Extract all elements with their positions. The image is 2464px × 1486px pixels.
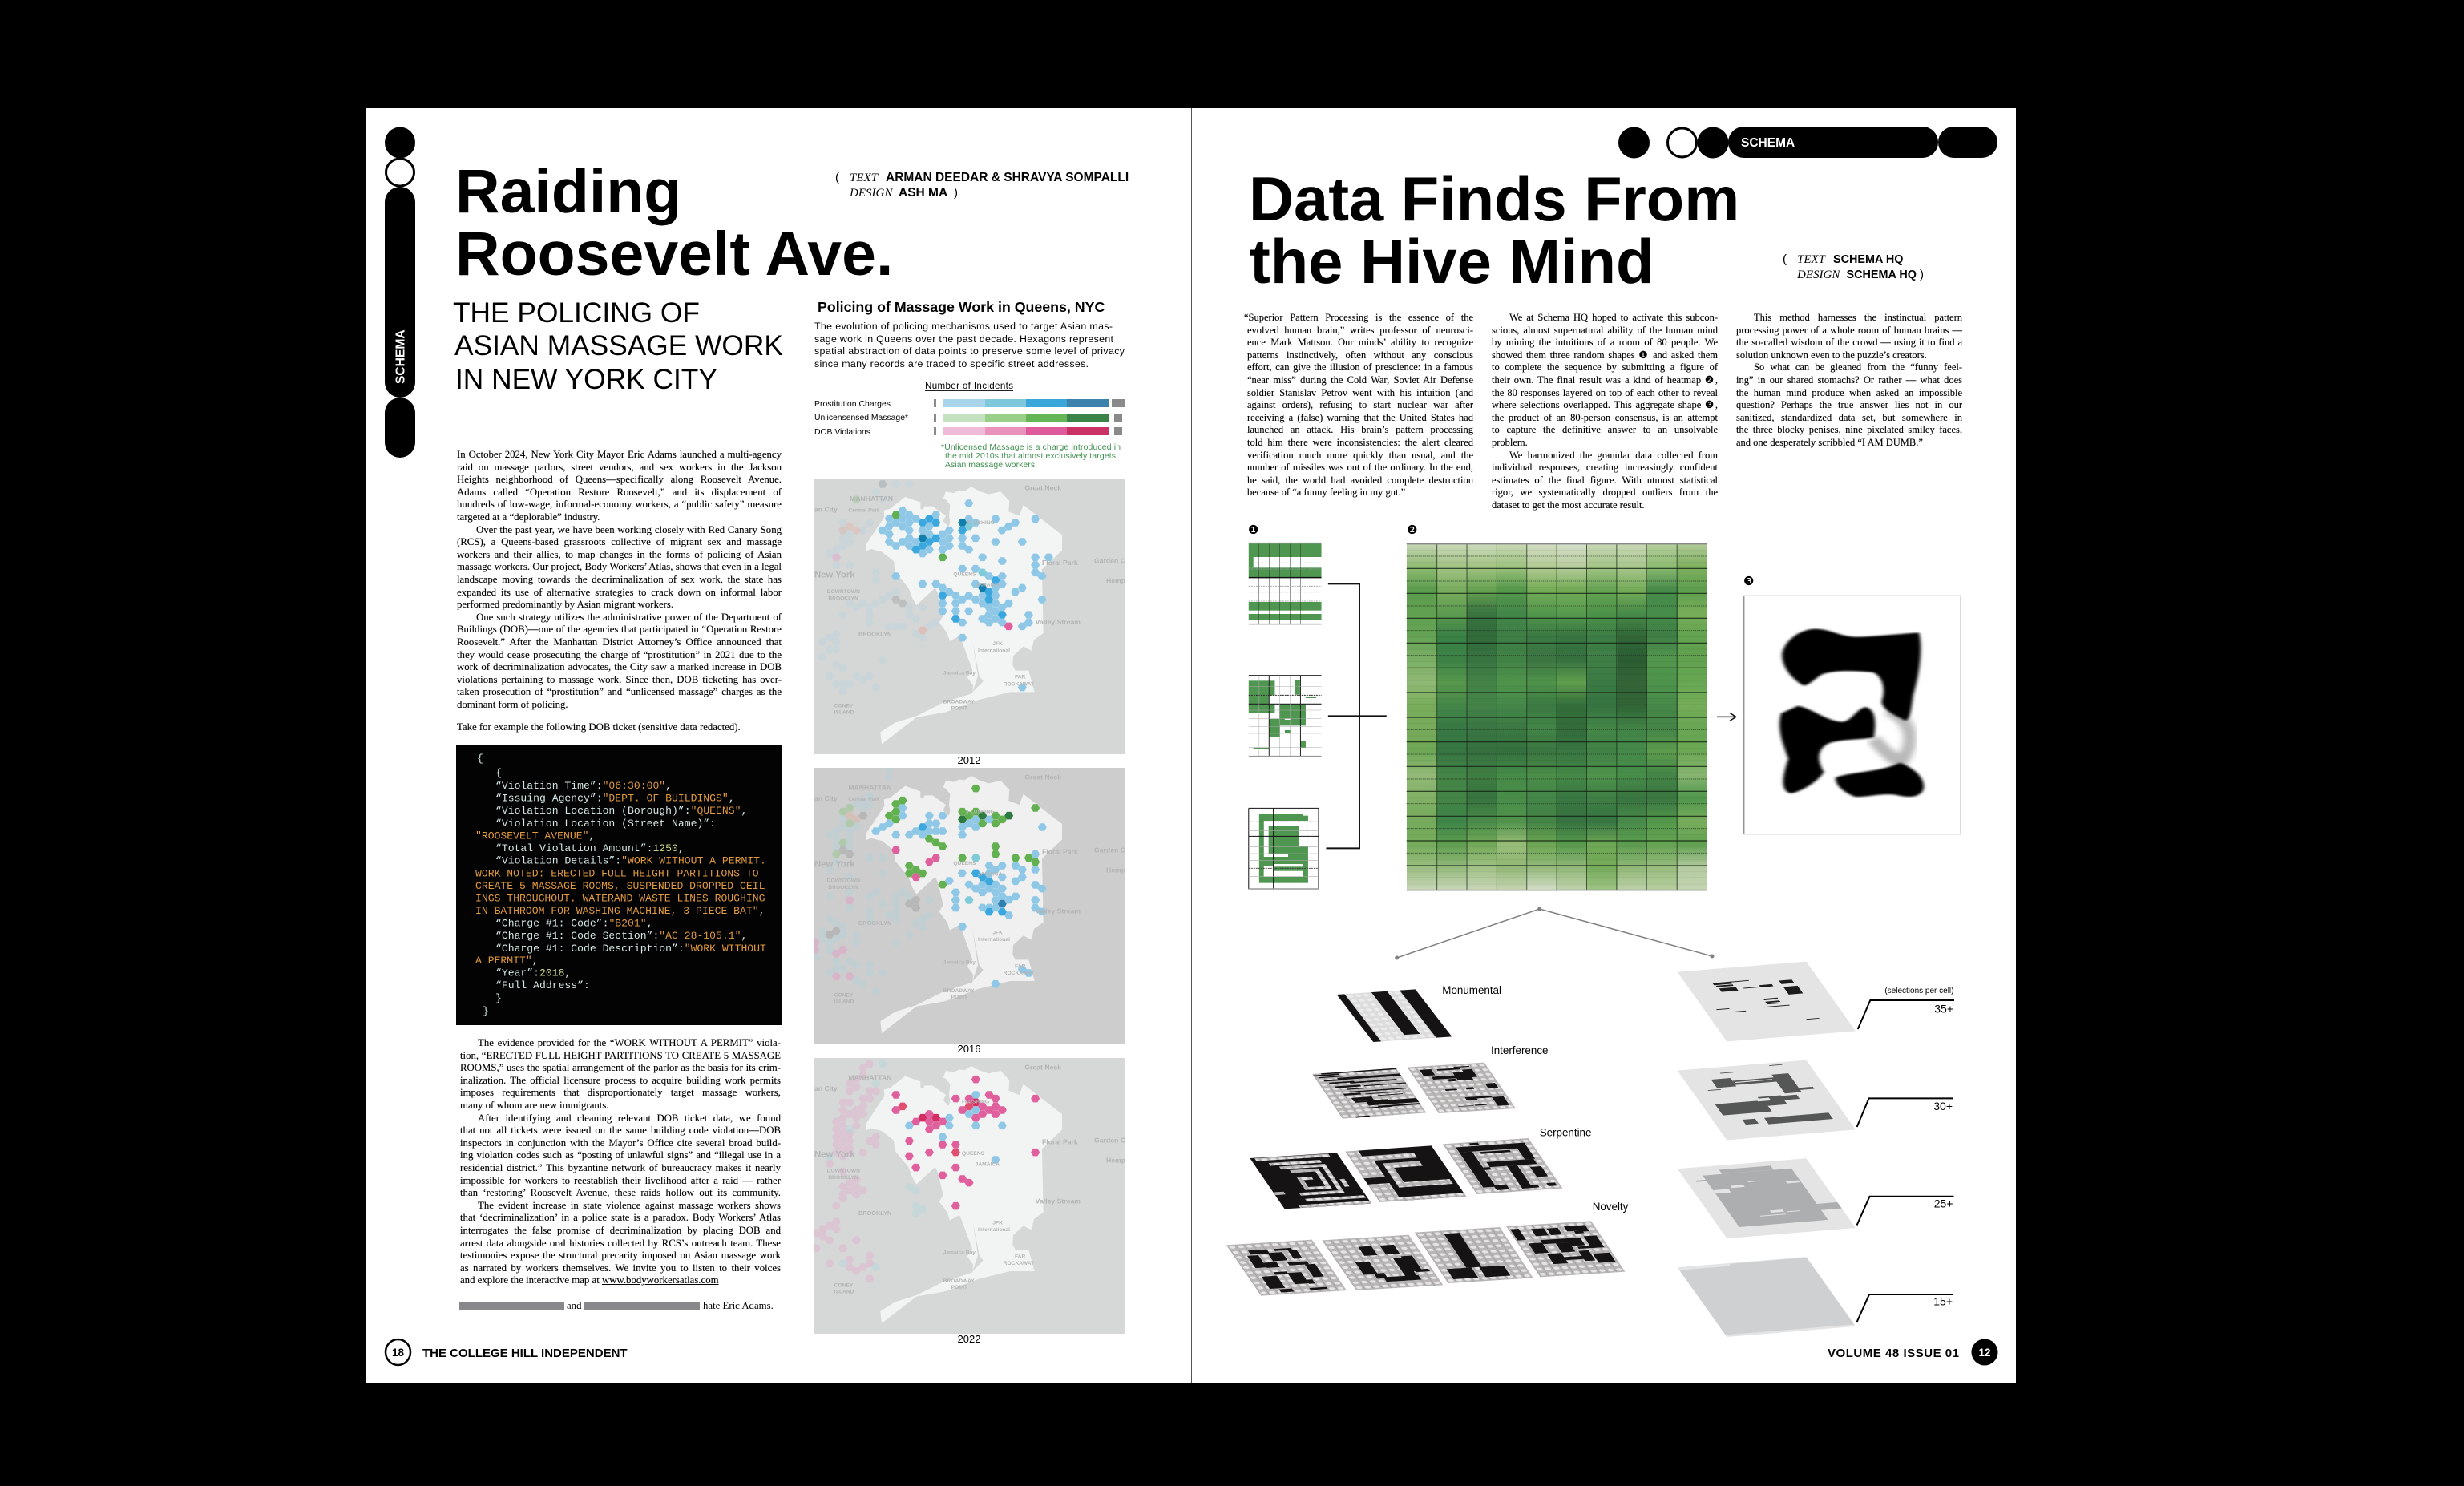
credits: left article: ASH MA: [899, 186, 947, 200]
map: 2016: Floral Park: [1042, 848, 1078, 856]
code block: DOB ticket: “Violation Location (Borough)”:"QUEENS",: [495, 805, 747, 817]
map: 2016: Jamaica Bay: [943, 959, 976, 965]
legend footnote: *Unlicensed Massage is a charge introduced in: [941, 443, 1121, 452]
text block: right column 2: problem.: [1492, 437, 1528, 448]
code block: DOB ticket: }: [483, 1005, 489, 1017]
map: 2012: Floral Park: [1042, 559, 1078, 567]
map: 2012: Central Park: [848, 507, 880, 513]
chart description: spatial abstraction of data points to preserve some level of privacy: [814, 345, 1125, 357]
code block: DOB ticket: “Charge #1: Code Description”:"WORK WITHOUT: [495, 943, 766, 955]
text block: left continuation: imposes requirements that disproportionately target massage workers,: [460, 1087, 781, 1098]
category labels: Monumental: [1442, 984, 1501, 996]
map: 2022: CONEY: [834, 1282, 854, 1288]
text block: left continuation: that not all tickets were issued on the same building code violation—DOB: [460, 1125, 781, 1136]
tab: right schema pills: [1618, 127, 1997, 159]
map: 2022: Valley Stream: [1036, 1197, 1081, 1205]
text block: left continuation: that ‘decriminalization’ in a police state is a paradox. Body Workers’ Atlas: [460, 1212, 781, 1223]
map: 2016: FAR: [1015, 963, 1026, 969]
map caption 2012: 2012: [958, 754, 980, 766]
map: 2022: an City: [814, 1084, 838, 1092]
text block: right column 2: scious, almost supernatural ability of the human mind: [1492, 325, 1718, 336]
redaction line: [459, 1300, 774, 1311]
credits: right article: (: [1783, 252, 1787, 266]
text block: right column 3: This method harnesses the instinctual pattern: [1754, 312, 1962, 323]
legend: number of incidents: Prostitution Charges: [814, 400, 891, 409]
tile group: Novelty: [1226, 1221, 1625, 1296]
text block: right column 1: evolved human brain,” writes professor of neurosci-: [1247, 325, 1473, 336]
subtitle: the policing of asian massage work: ASIAN MASSAGE WORK: [454, 330, 783, 361]
text block: left intro: [457, 449, 782, 710]
credits: right article: SCHEMA HQ: [1833, 253, 1903, 266]
text block: left intro: massage workers. Our project, Body Workers’ Atlas, shows that even in a legal: [457, 561, 782, 572]
text block: right column 1: because of “a funny feeling in my gut.”: [1247, 487, 1405, 498]
map: 2022: MANHATTAN: [848, 1074, 891, 1082]
map: 2012: an City: [814, 505, 838, 513]
text block: right column 1: told him there were inconsistencies: the alert cleared: [1247, 437, 1473, 448]
text block: left intro: In October 2024, New York City Mayor Eric Adams launched a multi-agency: [457, 449, 782, 460]
text block: right column 1: ence Mark Mattson. Our minds’ ability to recognize: [1247, 337, 1473, 348]
text block: right column 3: the three blocky penises, nine pixelated smiley faces,: [1736, 424, 1962, 435]
text block: left intro: performed predominantly by Asian migrant workers.: [457, 599, 673, 610]
title: Raiding Roosevelt Ave.: Roosevelt Ave.: [455, 220, 893, 289]
code block: DOB ticket: “Violation Details”:"WORK WITHOUT A PERMIT.: [495, 854, 766, 867]
code block: DOB ticket: INGS THROUGHOUT. WATERAND WASTE LINES ROUGHING: [475, 893, 765, 904]
map: 2012: MANHATTAN: [850, 495, 893, 503]
map: 2022: POINT: [951, 1285, 967, 1290]
map: 2012: ISLAND: [834, 710, 854, 716]
map: 2016: ROCKAWAY: [1004, 971, 1035, 976]
title: Data Finds From the Hive Mind: Data Finds From: [1249, 165, 1739, 234]
text block: left continuation: inspectors in conjunction with the Mayor’s Office cite several broad build-: [460, 1137, 781, 1149]
text block: left continuation: arrest data alongside oral histories collected by RCS’s outreach team. These: [460, 1238, 781, 1249]
threshold layer 25+: [1678, 1158, 1856, 1238]
map: 2012: JAMAICA: [976, 583, 1000, 588]
credits: right article: SCHEMA HQ: [1847, 269, 1917, 281]
code block: DOB ticket: “Charge #1: Code”:"B201",: [495, 917, 652, 930]
tile group: Monumental: [1337, 989, 1452, 1042]
category labels: Interference: [1491, 1044, 1548, 1056]
map: 2022: [812, 1058, 1144, 1334]
map: 2022: Hempstead: [1106, 1156, 1144, 1164]
code block: DOB ticket: “Violation Location (Street Name)”:: [495, 818, 716, 830]
threshold callouts: 35+: [1934, 1003, 1953, 1016]
map: 2016: an City: [814, 794, 838, 802]
text block: left continuation: many of whom are new immigrants.: [460, 1100, 609, 1111]
chart description: The evolution of policing mechanisms used to target Asian mas-: [814, 321, 1113, 332]
map: 2012: Valley Stream: [1036, 618, 1081, 626]
text block: right column 1: launched an attack. His brain’s pattern processing: [1247, 424, 1473, 435]
map: 2016: JFK: [992, 931, 1003, 936]
text block: DOB ticket lead-in: Take for example the following DOB ticket (sensitive data redacted).: [457, 721, 741, 733]
text block: left continuation: After identifying and cleaning relevant DOB ticket data, we found: [478, 1112, 781, 1124]
text block: right column 3: the so-called wisdom of the crowd — using it to find a: [1736, 337, 1962, 348]
text block: right column 3: processing power of a whole room of human brains —: [1736, 325, 1962, 336]
text block: right column 1: “near miss” during the Cold War, Soviet Air Defense: [1247, 374, 1473, 386]
text block: right column 3: So what can be gleaned from the “funny feel-: [1754, 361, 1962, 373]
footer: left page number: 18: [392, 1347, 404, 1359]
text block: right column 2: the 80 responses layered on top of each other to reveal: [1492, 387, 1718, 398]
heatmap fill: [1407, 544, 1707, 890]
title: Raiding Roosevelt Ave.: Raiding: [455, 157, 681, 226]
text block: right column 2: their own. The final result was a kind of heatmap ❷,: [1492, 374, 1718, 386]
threshold layer 15+: [1678, 1257, 1856, 1337]
text block: right column 2: to capture the definitive answer to an unsolvable: [1492, 424, 1718, 435]
chart description: [814, 321, 1125, 369]
text block: right column 2: the product of an 80-person consensus, is an attempt: [1492, 412, 1718, 423]
map: 2022: ISLAND: [834, 1289, 854, 1294]
threshold layer 30+: [1678, 1060, 1856, 1140]
map: 2022: International: [978, 1227, 1010, 1233]
bracket connector: [1326, 583, 1387, 848]
category labels: Novelty: [1593, 1201, 1629, 1213]
text block: left intro: Buildings (DOB)—one of the agencies that participated in “Operation Restore: [457, 624, 782, 635]
map: 2022: BROOKLYN: [858, 1209, 891, 1217]
title: Raiding Roosevelt Ave.: [455, 157, 893, 289]
tab: right schema pills: SCHEMA: [1741, 136, 1795, 150]
map: 2016: DOWNTOWN: [827, 878, 860, 884]
text block: left continuation: The evidence provided for the “WORK WITHOUT A PERMIT” viola-: [478, 1037, 781, 1048]
map: 2022: JAMAICA: [976, 1161, 1000, 1167]
text block: left intro: Roosevelt.” After the Manhattan District Attorney’s Office announced that: [457, 636, 782, 648]
text block: left intro: One such strategy utilizes the administrative power of the Department of: [476, 612, 782, 623]
credits: right article: DESIGN: [1796, 269, 1840, 281]
category labels: Serpentine: [1540, 1127, 1591, 1139]
map: 2016: JAMAICA: [978, 871, 1003, 877]
text block: left intro: hundreds of low-wage, informal-economy workers, a “public safety” measure: [457, 499, 782, 510]
chart description: sage work in Queens over the past decade. Hexagons represent: [814, 333, 1114, 345]
map: 2016: Central Park: [848, 797, 880, 802]
footer: right page number: 12: [1978, 1347, 1991, 1359]
tab: left schema pills: [385, 127, 415, 458]
map: 2022: FLUSHING: [962, 1100, 989, 1105]
text block: left continuation: tion, “ERECTED FULL HEIGHT PARTITIONS TO CREATE 5 MASSAGE: [460, 1050, 781, 1061]
credits: left article: ): [954, 186, 958, 200]
text block: left intro: taken prosecution of “prostitution” and “unlicensed massage” charges as the: [457, 686, 782, 697]
threshold callouts: (selections per cell): [1884, 987, 1954, 995]
text block: right column 1: patterns instinctively, often without any conscious: [1247, 349, 1473, 361]
text block: right column 1: receiving a (false) warning that the United States had: [1247, 412, 1473, 423]
figure markers 1 2 3: [1248, 523, 1754, 588]
text block: left intro: they would cease prosecuting the charge of “prostitution” in 2021 due to the: [457, 649, 782, 660]
text block: right column 2: to complete the sequence by submitting a figure of: [1492, 361, 1718, 373]
arrow: [1717, 713, 1736, 721]
credits: left article: ARMAN DEEDAR & SHRAVYA SOMPALLI: [886, 171, 1129, 184]
map: 2016: Hempstead: [1106, 866, 1144, 874]
map: 2016: ISLAND: [834, 999, 854, 1004]
text block: right column 1: verification much more quickly than usual, and the: [1247, 450, 1473, 461]
text block: left continuation: residential district.” This byzantine network of bureaucracy makes it nearly: [460, 1162, 781, 1173]
code block: DOB ticket: "ROOSEVELT AVENUE",: [475, 830, 595, 842]
text block: left continuation: The evident increase in state violence against massage workers shows: [478, 1200, 781, 1211]
text block: right column 3: and one desperately scribbled “I AM DUMB.”: [1736, 437, 1923, 448]
map: 2012: BROADWAY: [943, 699, 975, 705]
map: 2016: CONEY: [834, 992, 854, 998]
map: 2012: FAR: [1015, 675, 1026, 680]
text block: left intro: Heights neighborhood of Queens—specifically along Roosevelt Avenue.: [457, 474, 782, 485]
code block: DOB ticket: “Violation Time”:"06:30:00",: [495, 780, 672, 792]
text block: right column 3: sanitized, standardized data set, but somewhere in: [1736, 412, 1962, 423]
text block: left continuation: as narrated by workers themselves. We invite you to listen to their voices: [460, 1262, 781, 1274]
text block: left intro: expanded its use of alternative strategies to crack down on informal labor: [457, 587, 782, 598]
credits: left article: [835, 171, 1129, 200]
text block: right column 1: he said, the world had avoided complete destruction: [1247, 474, 1473, 486]
code block: DOB ticket: “Total Violation Amount”:1250,: [495, 842, 685, 854]
text block: right column 1: number of missiles was out of the ordinary. In the end,: [1247, 462, 1473, 473]
text block: right column 2: by mining the intuitions of a room of 80 people. We: [1492, 337, 1718, 348]
map: 2012: JFK: [992, 641, 1003, 647]
map: 2016: QUEENS: [953, 861, 976, 866]
code block: DOB ticket: “Charge #1: Code Section”:"AC 28-105.1",: [495, 930, 747, 942]
text block: right column 1: [1244, 312, 1473, 498]
map: 2012: Garden City: [1094, 557, 1133, 565]
map caption 2016: 2016: [958, 1043, 980, 1055]
credits: left article: (: [835, 171, 839, 184]
map: 2012: CONEY: [834, 704, 854, 709]
code block: DOB ticket: “Year”:2018,: [495, 967, 571, 979]
map: 2016: MANHATTAN: [848, 784, 891, 792]
code block: DOB ticket: IN BATHROOM FOR WASHING MACHINE, 3 PIECE BAT",: [475, 905, 765, 917]
figure markers 1 2 3: ❷: [1407, 523, 1417, 537]
redaction line: hate Eric Adams.: [703, 1300, 774, 1311]
text block: left continuation: testimonies expose the structural precarity imposed on Asian massage work: [460, 1250, 781, 1261]
text block: left intro: targeted at a “deplorable” industry.: [457, 511, 600, 523]
map: 2012: Great Neck: [1024, 484, 1061, 492]
threshold callouts: 25+: [1934, 1197, 1953, 1209]
map caption 2022: 2022: [958, 1333, 980, 1345]
map: 2012: New York: [814, 571, 855, 580]
map: 2016: Great Neck: [1024, 773, 1061, 781]
legend: number of incidents: Number of Incidents: [925, 381, 1013, 391]
chart description: since many records are traced to specific street addresses.: [814, 358, 1089, 369]
map: 2012: POINT: [951, 705, 967, 711]
code block: DOB ticket: “Issuing Agency”:"DEPT. OF BUILDINGS",: [495, 792, 735, 805]
map: 2012: Hempstead: [1106, 577, 1144, 585]
text block: right column 2: We at Schema HQ hoped to activate this subcon-: [1509, 312, 1718, 323]
code block: DOB ticket: A PERMIT",: [475, 955, 539, 967]
chart heading: Policing of Massage Work in Queens, NYC: [818, 299, 1105, 315]
text block: right column 2: individual responses, creating increasingly confident: [1492, 462, 1718, 473]
heatmap grid lines: [1407, 543, 1707, 890]
legend: number of incidents: Unlicensensed Massage*: [814, 414, 908, 422]
text block: right column 1: against orders), refusing to start nuclear war after: [1247, 399, 1473, 410]
category labels: [1442, 984, 1629, 1213]
input shape 2: [1249, 676, 1322, 757]
code block: DOB ticket: “Full Address”:: [495, 979, 590, 991]
title: Data Finds From the Hive Mind: the Hive Mind: [1250, 228, 1654, 297]
pattern tiles: categories: [1226, 989, 1625, 1296]
map: 2012: DOWNTOWN: [827, 589, 860, 595]
code block: DOB ticket: CREATE 5 MASSAGE ROOMS, SUSPENDED DROPPED CEIL-: [475, 880, 771, 892]
footer: publication name: THE COLLEGE HILL INDEPENDENT: [422, 1347, 628, 1360]
map: 2022: Garden City: [1094, 1136, 1133, 1144]
text block: left continuation: inalization. The official licensure process to acquire building work permits: [460, 1075, 781, 1086]
map: 2016: New York: [814, 859, 855, 869]
map: 2022: BROADWAY: [943, 1278, 975, 1284]
map: 2022: BROOKLYN: [828, 1175, 858, 1181]
footer: volume and issue: VOLUME 48 ISSUE 01: [1828, 1347, 1959, 1360]
text block: right column 1: effort, can give the illusion of prescience: in a famous: [1247, 361, 1473, 373]
text block: left continuation: interrogates the false promise of decriminalization by placing DOB and: [460, 1225, 781, 1236]
title: Data Finds From the Hive Mind: [1249, 165, 1739, 297]
text block: right column 3: solution unknown even to the puzzle’s creators.: [1736, 349, 1927, 361]
code block: DOB ticket: WORK NOTED: ERECTED FULL HEIGHT PARTITIONS TO: [475, 867, 759, 880]
map: 2016: Garden City: [1094, 846, 1133, 854]
code block: DOB ticket: [456, 745, 782, 1025]
map: 2016: [810, 765, 1144, 1044]
small grids and connectors: [1249, 543, 1961, 890]
map: 2012: [814, 479, 1144, 754]
text block: right column 3: question? Perhaps the true answer lies not in our: [1736, 399, 1962, 410]
map: 2022: New York: [814, 1149, 855, 1159]
text block: right column 2: showed them three random shapes ❶ and asked them: [1492, 349, 1718, 361]
map: 2022: FAR: [1015, 1254, 1026, 1259]
threshold callouts: [1856, 987, 1954, 1322]
code block: DOB ticket: }: [495, 992, 502, 1004]
aggregate shape panel: [1744, 596, 1961, 834]
threshold callouts: 30+: [1933, 1100, 1953, 1112]
credits: right article: [1783, 252, 1924, 281]
panel: right page: [1192, 108, 2016, 1383]
map: 2016: International: [978, 937, 1010, 943]
text block: left continuation: [460, 1037, 781, 1286]
threshold callouts: 15+: [1933, 1295, 1953, 1308]
map: 2022: Floral Park: [1042, 1138, 1078, 1146]
text block: right column 2: dataset to get the most accurate result.: [1492, 499, 1645, 511]
map: 2022: QUEENS: [962, 1151, 985, 1157]
legend: number of incidents: [814, 381, 1125, 437]
text block: left continuation: and explore the interactive map at www.bodyworkersatlas.com: [460, 1274, 719, 1286]
text block: left continuation: ROOMS,” uses the spatial arrangement of the parlor as the basis for its crim-: [460, 1062, 781, 1073]
threshold layer 35+: [1678, 962, 1856, 1042]
map: 2022: JFK: [992, 1221, 1003, 1226]
text block: left continuation: than ‘restoring’ Roosevelt Avenue, these raids hollow out its community.: [460, 1187, 781, 1198]
code block: DOB ticket: {: [495, 767, 502, 779]
map: 2012: QUEENS: [953, 571, 976, 577]
text block: right column 2: We harmonized the granular data collected from: [1509, 450, 1718, 461]
text block: right column 3: the human mind produce when asked an impossible: [1736, 387, 1962, 398]
text block: right column 1: soldier Stanislav Petrov went with his intuition (and: [1247, 387, 1473, 398]
subtitle: the policing of asian massage work: IN NEW YORK CITY: [455, 364, 717, 395]
text block: right column 3: [1736, 312, 1962, 448]
redaction line: and: [567, 1300, 582, 1311]
map: 2022: Great Neck: [1024, 1063, 1061, 1071]
credits: left article: TEXT: [850, 172, 879, 184]
text block: right column 2: [1491, 312, 1719, 511]
legend footnote: Asian massage workers.: [945, 461, 1037, 470]
map: 2012: FLUSHING: [967, 520, 995, 526]
legend: number of incidents: DOB Violations: [814, 428, 870, 437]
text block: right column 2: rigor, we systematically dropped outliers from the: [1492, 487, 1718, 498]
map: 2022: Jamaica Bay: [943, 1250, 976, 1255]
text block: left intro: landscape moving towards the decriminalization of sex work, the state has: [457, 574, 782, 585]
text block: left intro: violations pertaining to massage work. Since then, DOB ticketing has over-: [457, 674, 782, 685]
footer: left page number: [386, 1339, 410, 1365]
code block: DOB ticket: {: [477, 753, 483, 765]
input shape 1: [1249, 543, 1322, 624]
map: 2016: FLUSHING: [967, 810, 995, 815]
text block: left intro: workers and their allies, to map changes in the forms of policing of Asian: [457, 549, 782, 560]
panel: left page: [366, 108, 1191, 1383]
figure markers 1 2 3: ❶: [1248, 523, 1258, 537]
credits: right article: TEXT: [1797, 253, 1827, 266]
map: 2012: BROOKLYN: [828, 596, 858, 601]
text block: left intro: Adams called “Operation Restore Roosevelt,” and its displacement of: [457, 487, 782, 498]
page divider: [1191, 108, 1192, 1383]
map: 2022: DOWNTOWN: [827, 1169, 860, 1174]
text block: left intro: raid on massage parlors, street vendors, and sex workers in the Jackson: [457, 462, 782, 473]
footer: right page number: [1972, 1339, 1997, 1366]
map: 2012: BROOKLYN: [858, 630, 891, 637]
credits: right article: ): [1920, 268, 1924, 281]
fan connector to pattern tiles: [1395, 907, 1714, 960]
text block: right column 2: where selections overlapped. This aggregate shape ❸,: [1492, 399, 1718, 410]
map: 2016: Valley Stream: [1036, 907, 1081, 915]
text block: left intro: (RCS), a Queens-based grassroots collective of migrant sex and massage: [457, 536, 782, 547]
text block: left intro: work of decriminalization advocates, the City saw a marked increase in DOB: [457, 661, 782, 672]
input shape 3: [1249, 808, 1319, 889]
map: 2012: Jamaica Bay: [943, 671, 976, 676]
text block: left continuation: ing violation codes such as “posting of unlawful signs” and “illegal use in a: [460, 1149, 781, 1161]
map: 2016: BROOKLYN: [858, 919, 891, 927]
text block: right column 1: “Superior Pattern Processing is the essence of the: [1244, 312, 1473, 323]
tile group: Serpentine: [1250, 1138, 1562, 1209]
text block: right column 2: estimates of the final figure. With utmost statistical: [1492, 474, 1718, 486]
subtitle: the policing of asian massage work: THE POLICING OF: [453, 297, 700, 329]
legend footnote: the mid 2010s that almost exclusively targets: [945, 452, 1116, 461]
subtitle: the policing of asian massage work: [453, 297, 783, 395]
map: 2022: ROCKAWAY: [1004, 1261, 1035, 1266]
text block: right column 3: ing” in our shared stomachs? Or rather — what does: [1736, 374, 1962, 386]
map: 2016: BROOKLYN: [828, 885, 858, 890]
map: 2016: BROADWAY: [943, 988, 975, 994]
threshold tiles: [1678, 962, 1856, 1337]
tile group: Interference: [1312, 1063, 1516, 1119]
text block: left continuation: impossible for workers to reestablish their livelihood after a raid — rather: [460, 1175, 781, 1186]
tab: left schema pills: SCHEMA: [394, 329, 407, 384]
text block: left intro: dominant form of policing.: [457, 699, 568, 710]
text block: left intro: Over the past year, we have been working closely with Red Canary Song: [476, 524, 782, 535]
legend footnote: [941, 443, 1121, 470]
map: 2016: POINT: [951, 995, 967, 1000]
figure markers 1 2 3: ❸: [1743, 574, 1754, 588]
credits: left article: DESIGN: [849, 187, 893, 200]
map: 2012: International: [978, 648, 1010, 653]
map: 2012: ROCKAWAY: [1004, 681, 1035, 687]
